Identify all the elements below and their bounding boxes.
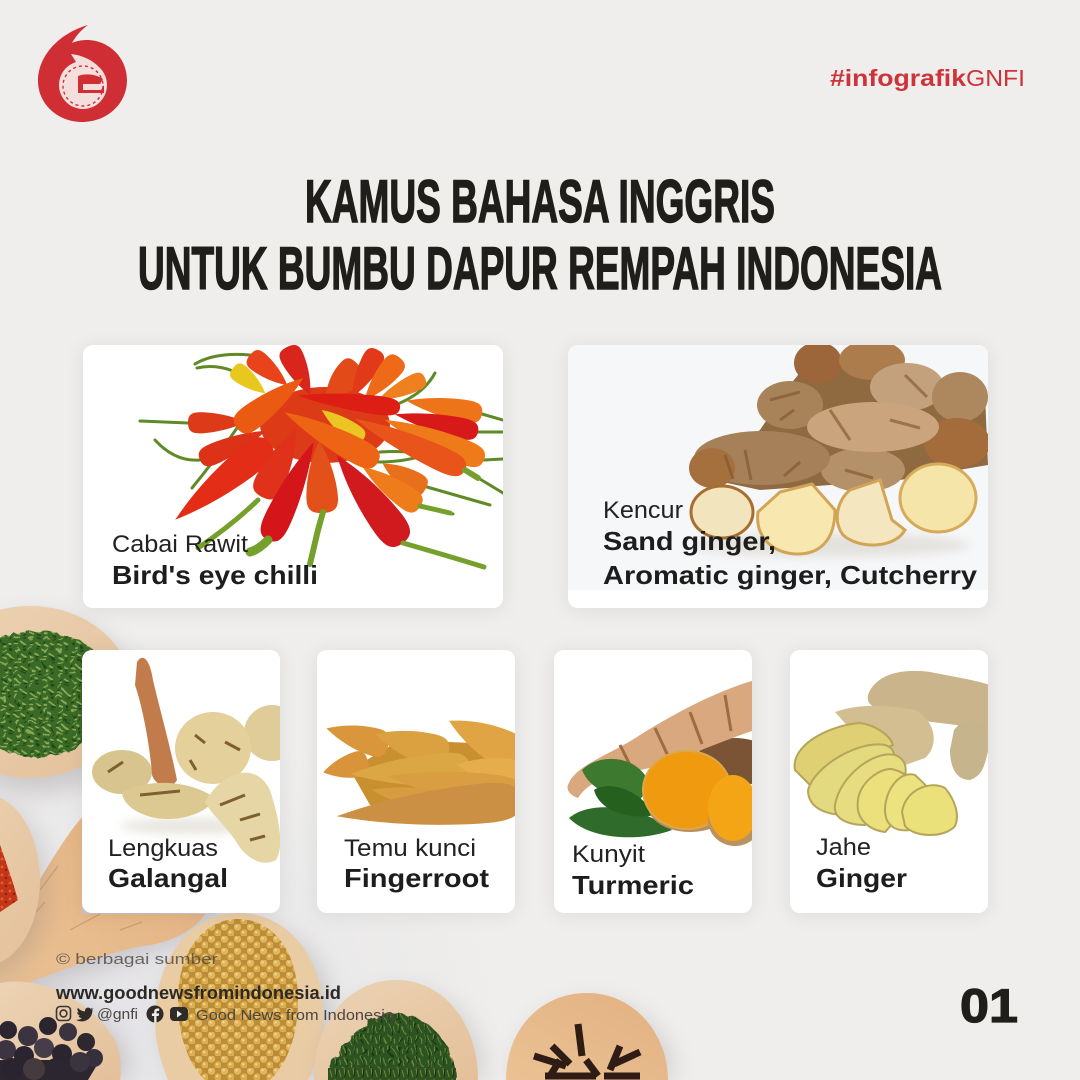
spoon: black pepper — [0, 982, 127, 1080]
label: jahe: Ginger — [816, 863, 907, 893]
background spoons with spices — [0, 606, 674, 1080]
spoon: dried green herbs — [0, 606, 138, 793]
website url: www.goodnewsfromindonesia.id — [55, 983, 341, 1003]
footer: website and social — [55, 983, 395, 1024]
label: kencur: Aromatic ginger, Cutcherry — [603, 560, 978, 590]
chilli centre mass — [260, 387, 390, 463]
label: cabai rawit — [112, 531, 318, 590]
label: lengkuas: Galangal — [108, 863, 228, 893]
illustration: ginger — [795, 671, 990, 835]
illustration: fingerroot — [323, 720, 515, 825]
label: temu kunci: Fingerroot — [344, 863, 489, 893]
black peppercorns — [0, 1017, 103, 1080]
label: kunyit — [572, 841, 694, 900]
front chillies — [175, 378, 410, 547]
source credit: © berbagai sumber — [56, 951, 218, 968]
page number: 01 — [960, 979, 1018, 1032]
cloves — [534, 1024, 640, 1076]
spoon: large empty wooden spoon — [0, 814, 240, 1000]
spoon: green herbs — [314, 980, 484, 1080]
label: cabai rawit: Cabai Rawit — [112, 531, 248, 558]
illustration: red chillies — [140, 342, 503, 567]
label: jahe — [816, 834, 907, 893]
hashtag: #infografikGNFI: #infografik — [830, 65, 966, 91]
hashtag: #infografikGNFI: GNFI — [966, 65, 1025, 91]
icon: facebook — [146, 1006, 164, 1022]
panel: cabai rawit — [83, 342, 503, 608]
icon: twitter — [76, 1008, 94, 1021]
illustration: galangal — [92, 658, 300, 863]
panel: temu kunci — [317, 650, 531, 913]
card background — [83, 345, 503, 608]
social name: Good News from Indonesia — [196, 1007, 395, 1024]
card background — [317, 650, 515, 913]
label: cabai rawit: Bird's eye chilli — [112, 560, 318, 590]
ginger slices — [795, 723, 957, 835]
illustration: sand ginger — [568, 340, 990, 590]
label: lengkuas: Lengkuas — [108, 835, 218, 862]
icon: youtube — [170, 1007, 188, 1021]
title: KAMUS BAHASA INGGRIS — [305, 168, 775, 235]
back chillies — [188, 342, 489, 517]
card background — [568, 345, 988, 608]
sliced sand ginger — [691, 464, 976, 554]
label: lengkuas — [108, 835, 228, 893]
label: kencur — [603, 497, 978, 590]
spoon: mustard seeds — [155, 913, 331, 1080]
spoon: cloves — [506, 993, 674, 1080]
label: kencur: Sand ginger, — [603, 526, 776, 556]
spoon: red chilli powder — [0, 794, 47, 978]
title — [138, 168, 942, 302]
label: kencur: Kencur — [603, 497, 683, 524]
logo: GNFI — [38, 25, 127, 122]
card background — [790, 650, 988, 913]
chilli stems — [140, 354, 503, 514]
card background — [554, 650, 752, 913]
handle: @gnfi — [97, 1006, 138, 1023]
panel: kunyit — [554, 650, 775, 913]
panel: kencur — [568, 340, 990, 608]
label: jahe: Jahe — [816, 834, 871, 861]
panel: lengkuas — [82, 650, 300, 913]
label: kunyit: Turmeric — [572, 870, 694, 900]
panel: jahe — [790, 650, 990, 913]
label: temu kunci: Temu kunci — [344, 835, 476, 862]
label: kunyit: Kunyit — [572, 841, 645, 868]
label: temu kunci — [344, 835, 489, 893]
illustration: turmeric — [568, 680, 752, 846]
chilli calyxes — [198, 470, 484, 567]
icon: instagram — [56, 1006, 70, 1020]
card background — [82, 650, 280, 913]
